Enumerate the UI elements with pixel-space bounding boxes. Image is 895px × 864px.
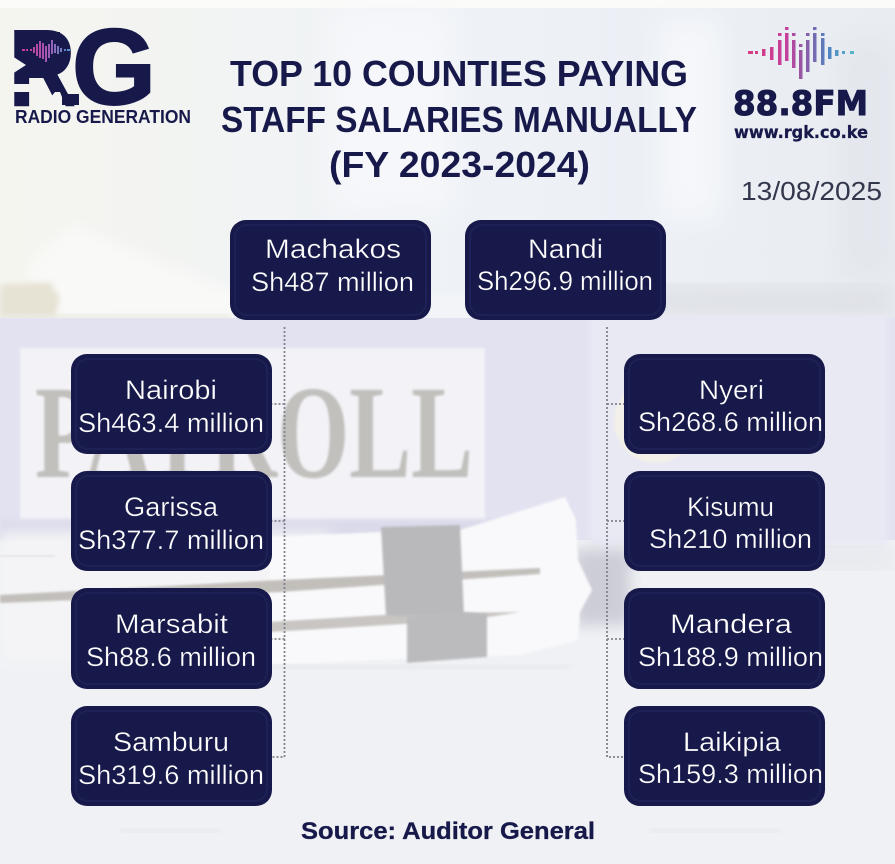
station frequency and website: 88.8FM <box>733 84 868 124</box>
card: Nairobi: Sh463.4 million <box>78 408 264 438</box>
connector: right dotted line <box>607 327 624 757</box>
card: Nandi: Sh296.9 million <box>477 266 653 296</box>
title: (FY 2023-2024) <box>329 144 590 185</box>
card: Nairobi <box>71 354 272 454</box>
card: Samburu: Samburu <box>113 727 229 757</box>
card: Machakos <box>230 220 431 320</box>
card: Kisumu: Kisumu <box>687 492 774 522</box>
card: Garissa: Garissa <box>124 492 219 522</box>
card: Nandi: Nandi <box>528 234 603 264</box>
date: 13/08/2025 <box>741 176 882 206</box>
card: Nyeri: Nyeri <box>699 375 764 405</box>
card: Garissa: Sh377.7 million <box>78 525 264 555</box>
card: Kisumu <box>624 471 825 571</box>
background: blurred payroll folder photo: PAYROLL <box>35 358 473 506</box>
card: Garissa <box>71 471 272 571</box>
card: Samburu <box>71 706 272 806</box>
card: Laikipia <box>624 706 825 806</box>
logo: Radio Generation: R <box>9 7 75 128</box>
card: Nandi <box>465 220 666 320</box>
card: Nairobi: Nairobi <box>125 375 217 405</box>
card: Mandera: Mandera <box>670 609 793 639</box>
logo: Radio Generation <box>9 6 191 128</box>
title <box>221 53 697 185</box>
card: Laikipia: Laikipia <box>683 727 782 757</box>
station frequency and website: www.rgk.co.ke <box>734 123 868 143</box>
card: Mandera <box>624 588 825 689</box>
icon: sound wave <box>748 27 854 79</box>
card: Mandera: Sh188.9 million <box>638 642 823 672</box>
card: Laikipia: Sh159.3 million <box>638 759 823 789</box>
station frequency and website <box>733 84 868 143</box>
card: Machakos: Sh487 million <box>251 267 414 297</box>
title: TOP 10 COUNTIES PAYING <box>230 53 688 94</box>
source note: Source: Auditor General <box>301 818 595 845</box>
card: Nyeri: Sh268.6 million <box>638 407 823 437</box>
logo caption: RADIO GENERATION <box>15 107 191 127</box>
connector: left dotted line <box>271 327 284 757</box>
card: Samburu: Sh319.6 million <box>78 760 264 790</box>
logo: Radio Generation: G <box>72 6 156 127</box>
card: Marsabit: Marsabit <box>115 609 229 639</box>
card: Nyeri <box>624 354 825 454</box>
card: Kisumu: Sh210 million <box>649 524 812 554</box>
card: Machakos: Machakos <box>265 234 401 264</box>
card: Marsabit: Sh88.6 million <box>86 642 256 672</box>
title: STAFF SALARIES MANUALLY <box>221 99 697 140</box>
card: Marsabit <box>71 588 272 689</box>
